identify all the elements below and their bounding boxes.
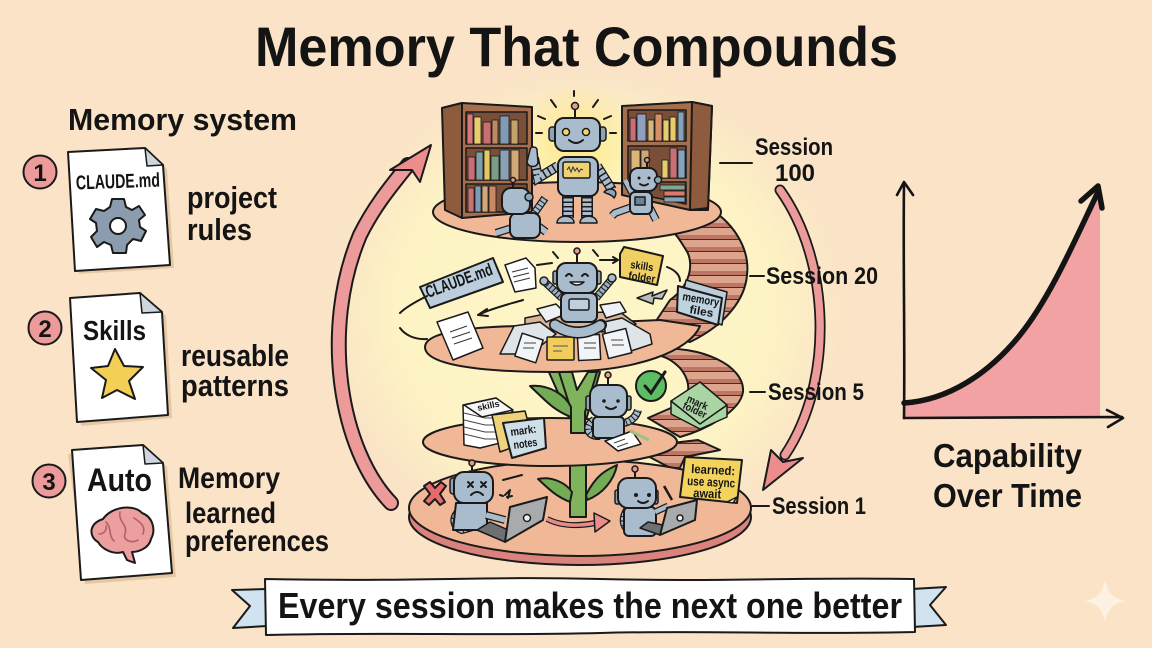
stack: mark folder: folder xyxy=(681,400,708,421)
robot: sitting left xyxy=(496,178,546,238)
icon: memory files: memory xyxy=(681,291,720,309)
panel: item 2 Skills xyxy=(28,293,289,426)
icon: star xyxy=(91,349,143,399)
arrow: upward left xyxy=(339,145,431,503)
title: Memory That Compounds xyxy=(255,15,898,78)
robot: session 5 xyxy=(586,372,649,451)
text: reusable patterns: reusable xyxy=(181,338,289,373)
bookshelf: left xyxy=(442,103,532,218)
chart label: Capability xyxy=(933,437,1083,474)
document: lower xyxy=(437,312,483,360)
label: session 5: Session 5 xyxy=(768,379,864,406)
icon: sparkle watermark xyxy=(1085,580,1125,622)
sparkle rays xyxy=(536,91,616,133)
paper pile: session 20 xyxy=(500,302,652,363)
document: Skills xyxy=(70,293,172,426)
folders: mark notes xyxy=(492,411,546,458)
text: memory learned preferences: Memory xyxy=(178,462,280,495)
icon: memory files xyxy=(677,280,727,325)
document: Auto: Auto xyxy=(87,462,152,498)
text: project rules xyxy=(187,180,277,247)
sticky note: learned: learned: xyxy=(691,462,736,478)
text: reusable patterns: patterns xyxy=(181,368,289,403)
text: memory learned preferences xyxy=(178,462,329,558)
platform: session 100 xyxy=(433,182,721,242)
chart label: Over Time xyxy=(933,477,1082,514)
plant xyxy=(538,370,617,517)
stairs: upper spiral xyxy=(650,205,747,342)
laptop: learned xyxy=(640,500,697,535)
stack: mark folder xyxy=(671,382,727,429)
text: project rules: project xyxy=(187,180,277,215)
stack: skills papers xyxy=(463,398,513,448)
text: project rules: rules xyxy=(187,212,252,247)
platform: session 5 xyxy=(423,418,677,466)
chart: capability curve xyxy=(897,182,1123,427)
label: CLAUDE.md tag xyxy=(420,258,503,308)
stack: skills papers: skills xyxy=(476,398,500,413)
banner: Every session makes the next one better xyxy=(278,585,902,626)
sticky note: learned: use async xyxy=(687,474,736,491)
arrow: downward right xyxy=(763,190,820,490)
arrow: grey to memory xyxy=(637,290,667,304)
document: Skills: Skills xyxy=(83,315,146,346)
stairs: lower spiral xyxy=(648,348,743,437)
robot: session 1 failing xyxy=(450,460,505,530)
arrow: improvement xyxy=(547,513,610,532)
robot: session 1 learned xyxy=(615,466,672,536)
folders: mark notes: mark: xyxy=(510,423,537,439)
icon: brain xyxy=(91,507,153,563)
stairs: bottom flight xyxy=(642,440,720,472)
banner xyxy=(232,578,946,635)
label: session 100: 100 xyxy=(775,160,815,187)
robot: sitting right xyxy=(612,158,662,220)
heading: memory system: Memory system xyxy=(68,102,297,137)
icon: green check xyxy=(636,371,666,401)
label: session 100 xyxy=(720,134,833,187)
icon: memory files: files xyxy=(688,304,714,320)
stack: mark folder: mark xyxy=(685,393,710,413)
robot: master robot xyxy=(527,102,616,223)
plant upper xyxy=(530,372,597,433)
badge 1 xyxy=(24,156,56,188)
folders: mark notes: notes xyxy=(513,437,538,452)
badge 1: 1 xyxy=(33,160,47,187)
text: memory learned preferences: preferences xyxy=(185,525,329,558)
label: session 20: Session 20 xyxy=(766,263,878,290)
bookshelf: right xyxy=(622,102,712,210)
panel: item 1 CLAUDE.md xyxy=(24,148,277,274)
robot: session 20 meditating xyxy=(540,248,616,332)
chart label xyxy=(933,437,1083,514)
icon: red cross xyxy=(424,482,446,505)
document: CLAUDE.md xyxy=(68,148,174,274)
platform: session 20 xyxy=(425,320,700,372)
badge 2 xyxy=(28,312,62,344)
label: session 1: Session 1 xyxy=(772,493,866,520)
icon: skills folder xyxy=(620,247,663,286)
platform: session 1 xyxy=(409,460,751,565)
badge 2: 2 xyxy=(38,316,52,343)
sticky note: learned: await xyxy=(693,486,722,502)
icon: gear xyxy=(90,199,146,253)
document: Auto xyxy=(68,445,176,584)
badge 3: 3 xyxy=(42,469,56,496)
sticky note: learned xyxy=(680,457,742,503)
document: upper xyxy=(505,258,536,292)
text: reusable patterns xyxy=(181,338,289,403)
motion lines and arrows xyxy=(400,257,680,339)
badge 3 xyxy=(32,464,66,498)
panel: item 3 Auto Memory xyxy=(32,445,329,584)
text: memory learned preferences: learned xyxy=(185,497,276,530)
document: CLAUDE.md: CLAUDE.md xyxy=(76,170,160,194)
icon: skills folder: skills xyxy=(630,259,654,274)
label: CLAUDE.md tag: CLAUDE.md xyxy=(423,260,495,302)
icon: skills folder: folder xyxy=(628,270,657,286)
confusion marks xyxy=(500,475,522,498)
laptop: failing xyxy=(477,497,547,542)
label: session 100: Session xyxy=(755,134,833,161)
